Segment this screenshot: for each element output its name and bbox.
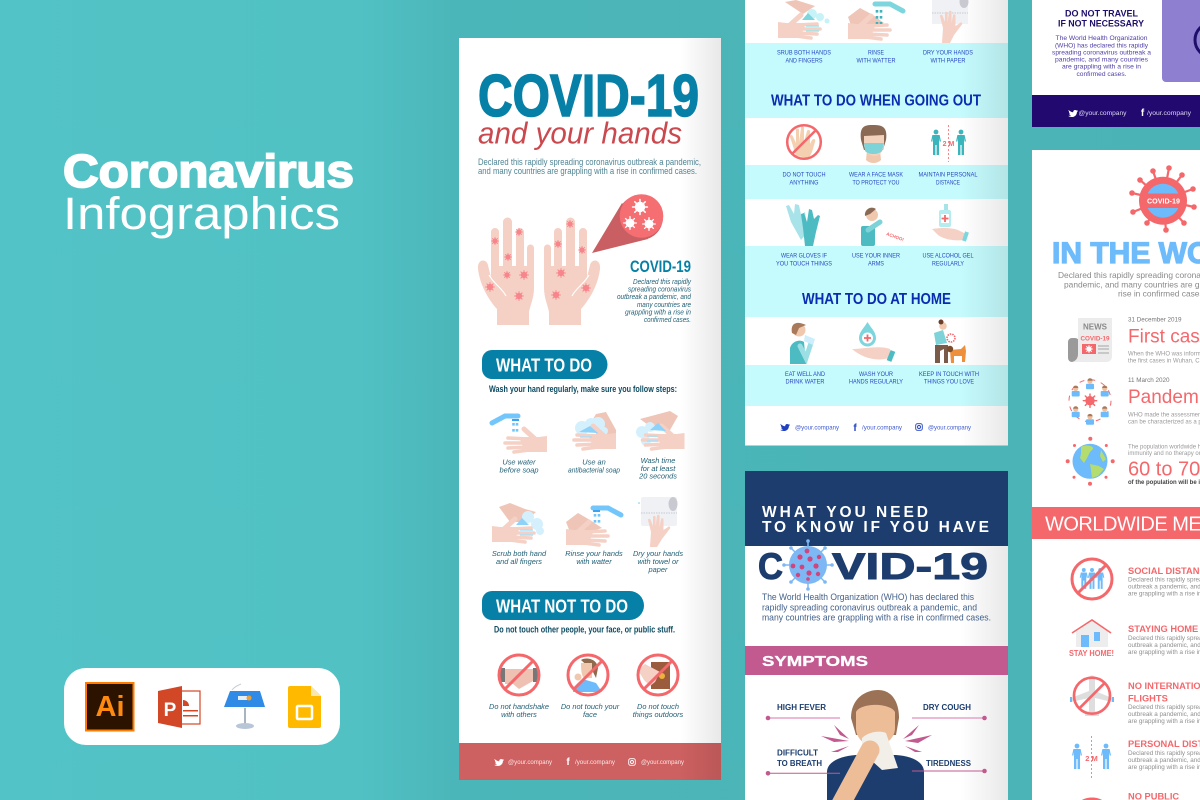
icon: no handshake <box>489 655 549 719</box>
panel: COVID-19 and your hands <box>459 38 721 780</box>
text block: COVID-19 note: spreading coronavirus <box>628 285 691 294</box>
icon: gloves <box>776 204 833 267</box>
step: dry: with towel or <box>637 557 679 566</box>
bands <box>745 43 1008 406</box>
icon: stay home <box>1069 620 1114 658</box>
step: wash time <box>636 411 684 481</box>
text block: pandemic: 11 March 2020 <box>1128 377 1170 384</box>
step: rinse <box>565 508 623 566</box>
step: dry: Dry your hands <box>633 549 683 558</box>
text block: WHO note: are grappling with a rise in <box>1062 64 1141 71</box>
heading: do not travel: IF NOT NECESSARY <box>1058 18 1144 28</box>
icon: alcohol gel: USE ALCOHOL GEL <box>922 253 974 260</box>
illustration: purple card <box>1162 0 1200 82</box>
header band: WHAT YOU NEED <box>762 504 928 521</box>
icon: no face touching: Do not touch your <box>561 702 620 711</box>
footer: social handles: @your.company <box>508 759 553 766</box>
step: dry: paper <box>648 565 668 574</box>
panel: software format badges <box>64 668 340 745</box>
footer: social handles: f <box>853 423 857 434</box>
icon: drink water: DRINK WATER <box>786 379 825 386</box>
heading: WHAT NOT TO DO <box>482 591 644 620</box>
icon: news: COVID-19 <box>1080 336 1110 342</box>
text block: COVID-19 note: Declared this rapidly <box>633 277 691 286</box>
step: rinse: Rinse your hands <box>565 549 623 558</box>
icon: personal distance <box>1072 736 1111 779</box>
step row: scrub, rinse, dry: SRUB BOTH HANDS <box>777 50 832 57</box>
icon: PowerPoint <box>158 686 200 728</box>
heading: do not travel <box>1058 8 1144 28</box>
text block: WHO note: spreading coronavirus outbreak a <box>1052 49 1151 56</box>
header band: TO KNOW IF YOU HAVE <box>762 519 989 536</box>
text block: WHO statement <box>762 592 991 623</box>
step: use water: before soap <box>499 466 539 474</box>
step row: scrub, rinse, dry <box>777 0 973 64</box>
icon: drink water <box>785 323 825 386</box>
step: use water: Use water <box>502 458 536 467</box>
icon: no touching outdoors: Do not touch <box>637 702 679 711</box>
text block: WHO statement: rapidly spreading coronavirus outbreak a pandemic, and <box>762 602 977 612</box>
icon: do not touch anything <box>782 125 826 186</box>
footer: social handles: f <box>566 757 570 768</box>
icon: no crowds <box>1072 559 1112 599</box>
title: COVID-19 with virus <box>758 539 988 591</box>
footer: social handles: @your.company <box>641 759 685 766</box>
icon: person and dog <box>919 320 979 386</box>
icon: do not touch anything: ANYTHING <box>790 179 818 186</box>
icon: sneeze into arm <box>852 208 905 267</box>
icon: gloves: YOU TOUCH THINGS <box>776 260 833 267</box>
title: Coronavirus Infographics: Infographics <box>63 188 340 239</box>
icon: drink water: EAT WELL AND <box>785 371 825 378</box>
text block: personal distance: are grappling with a rise in <box>1128 764 1200 771</box>
icon: face mask: TO PROTECT YOU <box>852 179 900 186</box>
symptom labels: TIREDNESS <box>926 759 972 768</box>
intro text: and many countries are grappling with a rise in confirmed cases. <box>478 166 697 177</box>
symptom labels: TO BREATH <box>777 759 822 768</box>
footer: social handles: @your.company <box>1078 110 1127 117</box>
icon: no public gatherings <box>1072 799 1112 800</box>
icon: Keynote <box>224 684 265 729</box>
text block: WHO note: The World Health Organization <box>1056 35 1148 42</box>
icon: face mask <box>849 125 903 186</box>
subheading: wash steps: Wash your hand regularly, make sure you follow steps: <box>489 384 677 394</box>
icon: COVID-19 virus: COVID-19 <box>1147 196 1180 206</box>
text block: COVID-19 note: grappling with a rise in <box>625 307 691 316</box>
illustration: infected hands <box>478 218 600 325</box>
footer: social handles: /your.company <box>862 424 903 432</box>
icon: 2 metres distance: MAINTAIN PERSONAL <box>918 172 978 179</box>
step: antibacterial soap <box>568 412 620 474</box>
step row: scrub, rinse, dry: RINSE <box>868 50 884 57</box>
icon: wash hands: HANDS REGULARLY <box>849 379 903 386</box>
text block: no flights: are grappling with a rise in <box>1128 718 1200 725</box>
symptom labels: HIGH FEVER <box>777 703 826 712</box>
icon: Google Slides <box>288 686 321 728</box>
icon: Adobe Illustrator <box>86 683 134 730</box>
footer: social handles <box>459 743 721 780</box>
text block: social distancing: are grappling with a rise in <box>1128 591 1200 598</box>
heading: WORLDWIDE MEASURES <box>1032 507 1200 539</box>
heading: WHAT TO DO <box>482 350 608 379</box>
subheading: do not touch: Do not touch other people, your face, or public stuff. <box>494 625 675 635</box>
icon: 2 metres distance <box>918 125 978 186</box>
footer: social handles: /your.company <box>1147 110 1192 117</box>
footer: social handles: f <box>1141 108 1145 119</box>
panel: what you need to know <box>745 471 1008 800</box>
text block: staying home <box>1128 624 1200 656</box>
text block: no flights: FLIGHTS <box>1128 694 1168 704</box>
callout: virus magnifier <box>592 194 663 253</box>
icon: wash hands <box>849 322 903 386</box>
icon: pandemic people ring <box>1069 378 1111 425</box>
icon: do not touch anything: DO NOT TOUCH <box>782 172 826 179</box>
step: antibacterial soap: Use an <box>582 458 606 467</box>
heading: and your hands: and your hands <box>478 116 682 150</box>
text block: social distancing <box>1128 566 1200 598</box>
text block: WHO note: (WHO) has declared this rapidly <box>1055 42 1149 49</box>
icon: stay home: STAY HOME! <box>1069 649 1114 658</box>
icon: no face touching: face <box>583 710 597 719</box>
text block: WHO statement: many countries are grappling with a rise in confirmed cases. <box>762 613 991 623</box>
step: antibacterial soap: antibacterial soap <box>568 466 620 474</box>
step row: scrub, rinse, dry: WITH PAPER <box>930 57 966 64</box>
intro text <box>478 157 701 177</box>
symptom labels: DRY COUGH <box>923 703 971 712</box>
text block: COVID-19 note: confirmed cases. <box>644 315 691 324</box>
text block: no flights <box>1128 681 1200 725</box>
step: dry <box>633 497 683 574</box>
header band <box>745 471 1008 546</box>
text block: WHO note <box>1052 35 1151 78</box>
step: wash time: for at least <box>641 464 676 473</box>
icon: face mask: WEAR A FACE MASK <box>849 172 903 179</box>
text block: COVID-19 note <box>617 257 692 324</box>
heading: do not travel: DO NOT TRAVEL <box>1065 8 1138 18</box>
heading: SYMPTOMS <box>745 646 1008 675</box>
text block: WHO note: confirmed cases. <box>1076 71 1127 78</box>
step row: scrub, rinse, dry: DRY YOUR HANDS <box>923 50 973 57</box>
icon: wash hands: WASH YOUR <box>859 371 893 378</box>
icon: 2 metres distance: DISTANCE <box>936 179 960 186</box>
icon: gloves: WEAR GLOVES IF <box>781 253 827 260</box>
icon: no face touching <box>561 655 620 719</box>
step: wash time: Wash time <box>641 456 675 465</box>
text block: WHO note: pandemic, and many countries <box>1055 57 1149 64</box>
text block: first case <box>1128 316 1200 365</box>
step row: scrub, rinse, dry: AND FINGERS <box>786 57 823 64</box>
text block: 60 to 70% <box>1128 444 1200 486</box>
illustration: sick person <box>821 690 932 800</box>
icon: globe <box>1066 437 1115 486</box>
icon: no handshake: with others <box>501 710 537 719</box>
icon: 2 metres distance: 2 M <box>943 141 955 148</box>
text block: COVID-19 note: many countries are <box>637 300 691 309</box>
title: Coronavirus Infographics <box>63 145 354 239</box>
icon: PowerPoint: P <box>164 700 177 721</box>
icon: news <box>1068 318 1112 362</box>
icon: no handshake: Do not handshake <box>489 702 549 711</box>
panel: do not travel <box>1032 0 1200 127</box>
heading: at home: WHAT TO DO AT HOME <box>802 291 951 308</box>
footer: social handles: /your.company <box>575 759 616 766</box>
footer: social handles: @your.company <box>795 424 840 432</box>
icon: personal distance: 2 M <box>1085 754 1098 763</box>
step: scrub: Scrub both hand <box>492 549 547 558</box>
icon: alcohol gel: REGULARLY <box>932 260 964 267</box>
text block: personal distance <box>1128 739 1200 771</box>
text block: staying home: STAYING HOME <box>1128 624 1198 634</box>
title: Coronavirus Infographics: Coronavirus <box>63 145 354 197</box>
step: rinse: with watter <box>576 557 612 566</box>
text block: first case: 31 December 2019 <box>1128 316 1182 323</box>
icon: news: NEWS <box>1083 322 1108 332</box>
icon: no touching outdoors: things outdoors <box>633 710 684 719</box>
icon: sneeze into arm: ARMS <box>868 260 884 267</box>
text block: staying home: are grappling with a rise in <box>1128 649 1200 656</box>
panel: what to do going out and at home <box>745 0 1008 446</box>
icon: sneeze into arm: USE YOUR INNER <box>852 253 900 260</box>
icon: person and dog: THINGS YOU LOVE <box>924 379 974 386</box>
symptom labels: DIFFICULT <box>777 749 818 758</box>
step: wash time: 20 seconds <box>638 472 677 481</box>
text block: WHO statement: The World Health Organization (WHO) has declared this <box>762 592 974 602</box>
icon: COVID-19 virus <box>1129 165 1197 233</box>
text block: intro <box>1058 270 1200 299</box>
heading: SYMPTOMS: SYMPTOMS <box>762 654 868 670</box>
step: scrub <box>492 503 547 566</box>
icon: no flights <box>1070 676 1114 716</box>
title: COVID-19 with virus: C <box>758 546 783 587</box>
footer: social handles: @your.company <box>928 424 972 432</box>
heading: WHAT NOT TO DO: WHAT NOT TO DO <box>496 597 628 617</box>
step: scrub: and all fingers <box>496 557 542 566</box>
icon: alcohol gel <box>922 204 974 267</box>
step row: scrub, rinse, dry: WITH WATTER <box>856 57 896 64</box>
heading: WHAT TO DO: WHAT TO DO <box>496 356 592 376</box>
text block: COVID-19 note: outbreak a pandemic, and <box>617 292 692 301</box>
heading: COVID-19: COVID-19 <box>478 63 699 129</box>
panel: in the world <box>1032 150 1200 800</box>
text block: pandemic <box>1128 377 1200 426</box>
icon: sneeze into arm: ACHOO! <box>886 231 905 242</box>
icon: person and dog: KEEP IN TOUCH WITH <box>919 371 979 378</box>
step: use water <box>492 416 547 474</box>
symptom labels <box>766 703 987 776</box>
footer: social handles <box>780 423 972 434</box>
intro text: Declared this rapidly spreading coronavirus outbreak a pandemic, <box>478 157 701 168</box>
text block: COVID-19 note: COVID-19 <box>630 257 691 276</box>
footer: social handles <box>1032 95 1200 127</box>
heading: going out: WHAT TO DO WHEN GOING OUT <box>771 92 981 109</box>
icon: Adobe Illustrator: Ai <box>96 691 124 723</box>
icon: no touching outdoors <box>633 655 684 719</box>
title: COVID-19 with virus: VID-19 <box>832 546 988 587</box>
